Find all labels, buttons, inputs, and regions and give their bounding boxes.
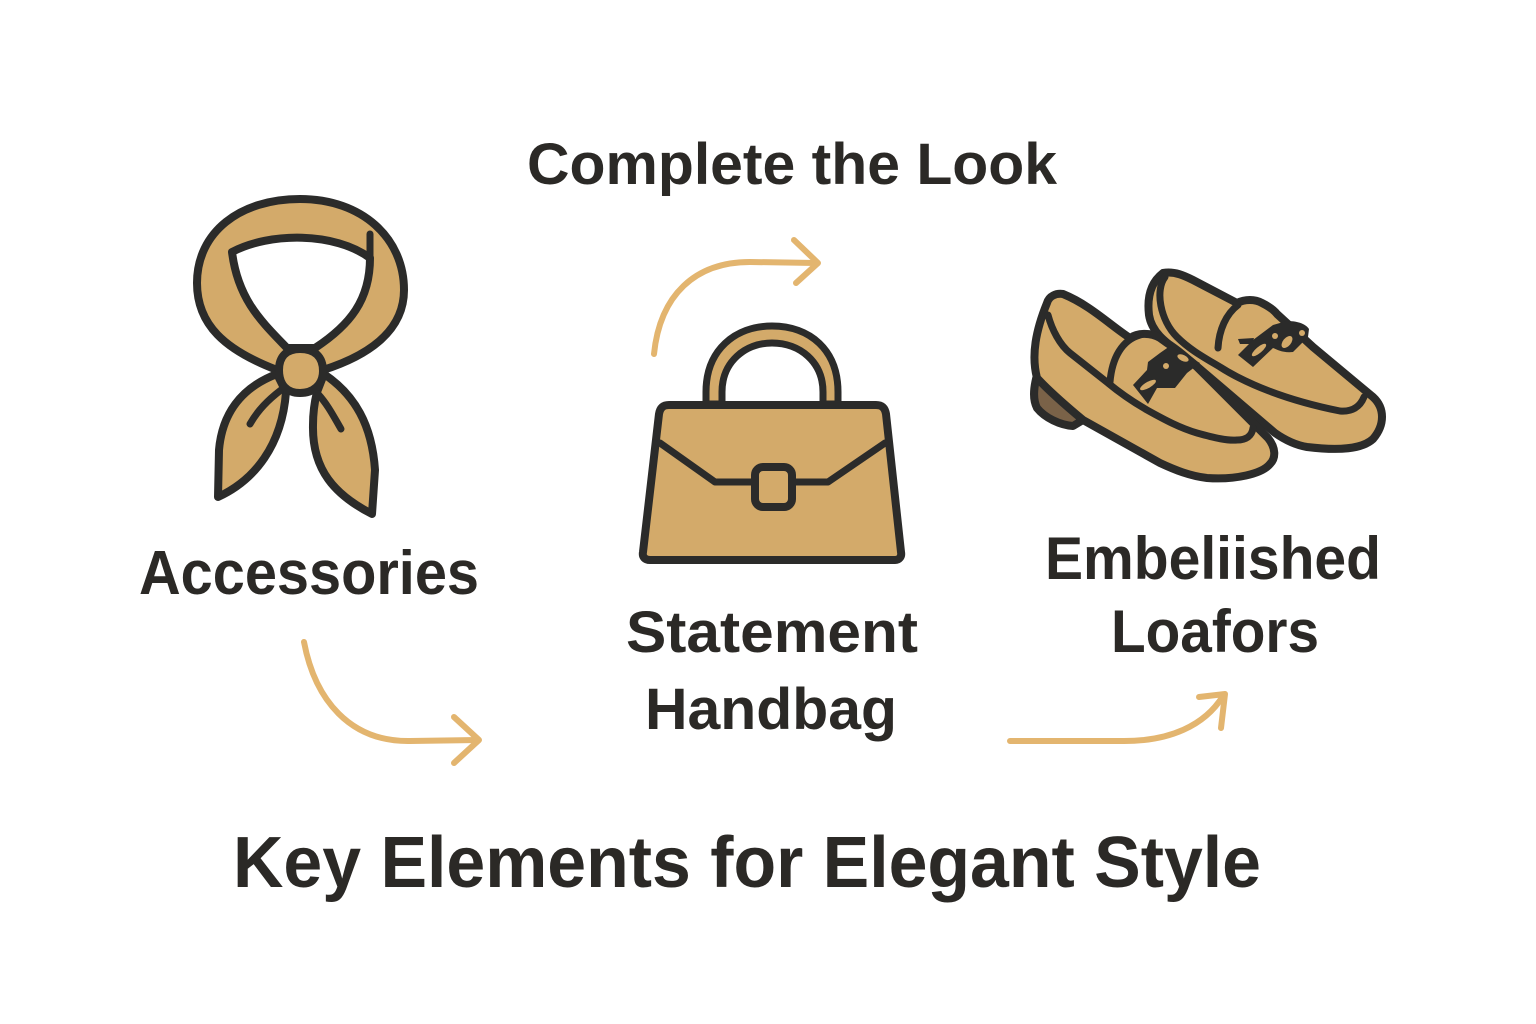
icon: scarf (197, 199, 404, 514)
bag clasp (755, 467, 792, 507)
label: Accessories: Accessories (139, 539, 479, 608)
bag flap (660, 443, 885, 482)
title: Key Elements for Elegant Style: Key Elements for Elegant Style (233, 823, 1261, 903)
bag body (643, 405, 901, 560)
label: Statement Handbag (626, 600, 918, 742)
label: Embeliished Loafors: Loafors (1111, 598, 1319, 665)
heading: Complete the Look: Complete the Look (527, 132, 1058, 197)
label: Statement Handbag: Handbag (645, 677, 897, 742)
icon: loafers (1034, 273, 1382, 478)
label: Embeliished Loafors: Embeliished (1045, 525, 1381, 592)
front loafer (1034, 294, 1274, 478)
front loafer ornament (1133, 346, 1200, 404)
arrow: handbag to loafers (1010, 694, 1225, 741)
label: Embeliished Loafors (1045, 525, 1381, 665)
bag handle (706, 326, 838, 404)
label: Statement Handbag: Statement (626, 600, 918, 665)
icon: handbag (643, 326, 901, 560)
front loafer heel (1034, 375, 1083, 426)
arrow: accessories to handbag (304, 642, 479, 763)
back loafer (1148, 273, 1382, 449)
arrow: up to complete the look (654, 240, 818, 354)
back loafer ornament (1238, 321, 1309, 367)
